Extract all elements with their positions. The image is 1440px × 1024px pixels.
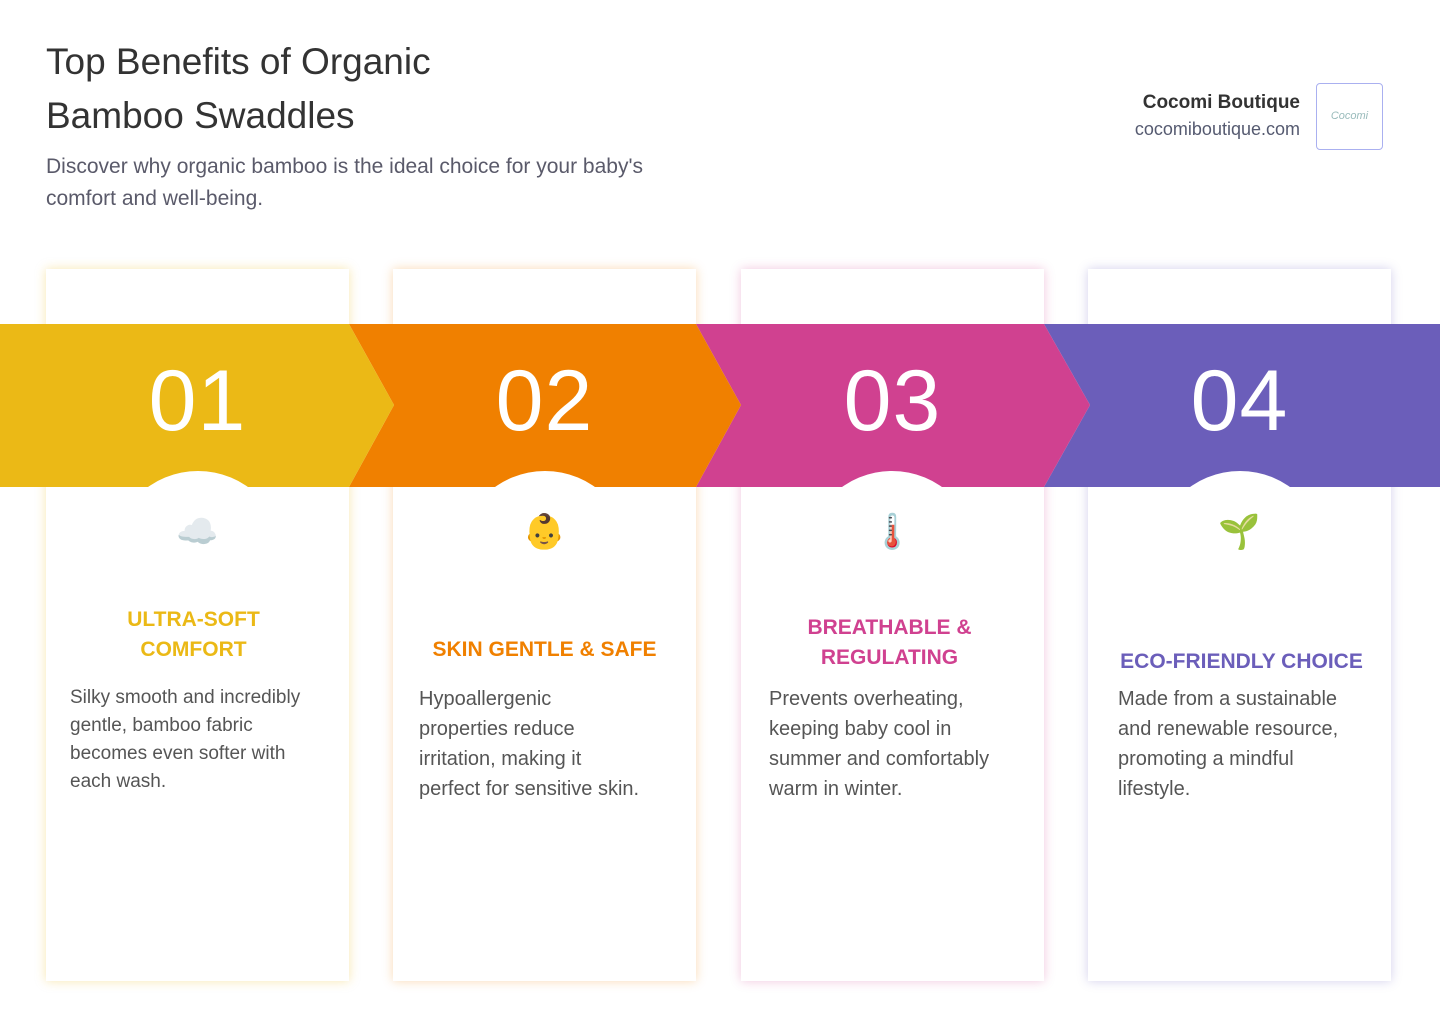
text: 04: [1191, 353, 1288, 449]
subtitle: Discover why organic bamboo is the ideal choice for your baby's comfort and well-being.: [46, 155, 643, 210]
text: 👶: [523, 513, 566, 551]
text: perfect for sensitive skin.: [419, 778, 639, 800]
card 3: [741, 269, 1044, 981]
card 4: [1088, 269, 1391, 981]
text: promoting a mindful: [1118, 748, 1294, 770]
text: 🌱: [1218, 513, 1261, 551]
text: and renewable resource,: [1118, 718, 1338, 740]
logo: Cocomi: [1331, 110, 1368, 122]
text: SKIN GENTLE & SAFE: [432, 638, 657, 661]
text: 02: [496, 353, 593, 449]
headings: COMFORT: [140, 638, 247, 661]
text: summer and comfortably: [769, 748, 989, 770]
brand: Cocomi Boutique: [1143, 92, 1300, 113]
text: warm in winter.: [769, 778, 902, 800]
logo: [1316, 83, 1383, 150]
numbers: 01: [149, 353, 246, 449]
icons: ☁️: [176, 513, 219, 551]
title: Bamboo Swaddles: [46, 95, 355, 136]
brand: cocomiboutique.com: [1135, 119, 1300, 139]
text: 🌡️: [871, 513, 914, 551]
title: Top Benefits of Organic: [46, 41, 431, 82]
brand: [1135, 92, 1300, 139]
text: properties reduce: [419, 718, 575, 740]
headings: ULTRA-SOFT: [127, 608, 260, 631]
text: irritation, making it: [419, 748, 581, 770]
text: Hypoallergenic: [419, 688, 551, 710]
body texts: Silky smooth and incredibly: [70, 687, 300, 708]
text: REGULATING: [821, 646, 958, 669]
body texts: gentle, bamboo fabric: [70, 715, 253, 736]
headings: [127, 608, 260, 661]
text: ECO-FRIENDLY CHOICE: [1120, 650, 1363, 673]
text: keeping baby cool in: [769, 718, 951, 740]
title: [46, 41, 431, 136]
text: lifestyle.: [1118, 778, 1190, 800]
arrow band: [0, 324, 1440, 487]
text: Prevents overheating,: [769, 688, 964, 710]
body texts: [70, 687, 300, 792]
text: BREATHABLE &: [807, 616, 972, 639]
body texts: each wash.: [70, 771, 166, 792]
text: 03: [844, 353, 941, 449]
text: Made from a sustainable: [1118, 688, 1337, 710]
card 1: [46, 269, 349, 981]
card 2: [393, 269, 696, 981]
body texts: becomes even softer with: [70, 743, 285, 764]
